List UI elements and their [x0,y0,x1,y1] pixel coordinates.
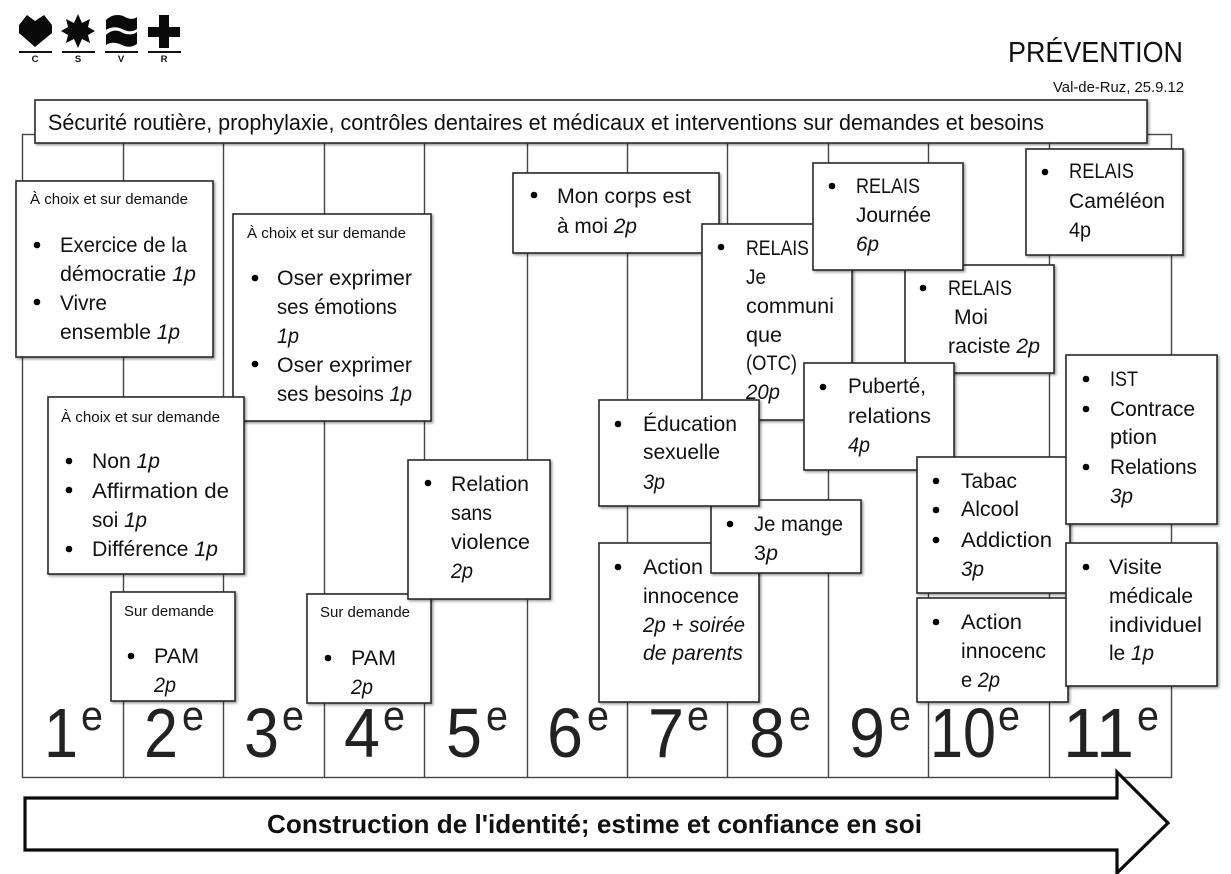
panel: tabac alcool addiction: 3p [961,558,984,581]
panel: RELAIS Caméléon: Caméléon [1069,190,1165,213]
grade labels: 9 [849,694,885,772]
panel: affirmation: À choix et sur demande [61,409,220,426]
panel: puberté [804,363,954,470]
panel: émotions et besoins: Oser exprimer [277,354,412,377]
panel: RELAIS Je communique: que [746,324,782,347]
panel: PAM 4e: 2p [350,676,373,699]
panel: RELAIS Moi raciste [905,265,1054,373]
panel: action innocence 7e [599,543,759,702]
panel: RELAIS Moi raciste: RELAIS [948,277,1012,300]
place and date: Val-de-Ruz, 25.9.12 [1053,80,1184,96]
grade labels: 1 [44,694,78,772]
panel: relation sans violence: 2p [450,560,473,583]
grade labels: 11 [1063,694,1134,772]
panel: RELAIS Moi raciste: Moi [954,306,988,329]
icon: waves [106,15,137,47]
panel: relation sans violence [408,460,550,599]
panel: visite médicale [1066,543,1217,686]
panel: tabac alcool addiction: Tabac [961,470,1017,493]
panel: émotions et besoins: À choix et sur demande [247,225,406,242]
grade labels: 8 [749,694,785,772]
panel: RELAIS Journée: RELAIS [856,175,920,198]
panel: relation sans violence: violence [451,531,530,554]
panel: émotions et besoins: ses besoins 1p [277,383,412,406]
panel: éducation sexuelle: Éducation [643,413,737,436]
panel: tabac alcool addiction [917,457,1070,593]
panel: RELAIS Je communique: RELAIS [746,237,809,260]
panel: démocratie: À choix et sur demande [30,191,188,208]
panel: affirmation: Affirmation de [92,480,229,503]
icon: heart [19,15,52,47]
panel: émotions et besoins [233,214,431,421]
panel: RELAIS Je communique: 20p [745,381,780,404]
grade labels: e [81,692,103,739]
grade labels: 5 [446,694,482,772]
grade labels: e [182,692,204,739]
logo letters [32,54,168,65]
panel: PAM 2e [111,592,235,701]
panel: affirmation: soi 1p [92,509,147,532]
title: PRÉVENTION [1008,36,1183,69]
panel: visite médicale: Visite [1109,556,1162,579]
panel: IST contraception [1066,355,1217,524]
panel: action innocence 7e: Action [643,556,703,579]
panel: RELAIS Journée: 6p [856,233,879,256]
panel: je mange [711,500,861,573]
panel: mon corps est à moi: à moi 2p [557,215,637,238]
grade labels: e [282,692,304,739]
panel: émotions et besoins: 1p [277,325,299,348]
grade labels: e [587,692,609,739]
panel: visite médicale: médicale [1109,585,1193,608]
logo underlines [19,51,181,53]
panel: émotions et besoins: Oser exprimer [277,267,412,290]
arrow: construction de l'identité: Construction de l'identité; estime et confiance en soi [267,809,922,839]
panel: RELAIS Je communique: (OTC) [746,352,797,375]
grade labels: 4 [344,694,380,772]
panel: éducation sexuelle: sexuelle [643,441,720,464]
panel: visite médicale: individuel [1109,614,1202,637]
panel: IST contraception: Contrace [1110,398,1195,421]
grade labels: 6 [547,694,583,772]
panel: PAM 4e: PAM [351,647,396,670]
panel: tabac alcool addiction: Addiction [961,529,1052,552]
grade labels: e [687,692,709,739]
panel: action innocence 10e: Action [961,611,1022,634]
panel: PAM 4e [307,594,431,703]
panel: puberté: Puberté, [848,375,926,398]
logo letters: V [118,54,125,65]
grade labels: e [1137,692,1159,739]
icon: star [61,14,95,48]
grade labels: 10 [930,694,996,772]
grade labels: e [998,692,1020,739]
panel: mon corps est à moi: Mon corps est [557,185,691,208]
panel: visite médicale: le 1p [1109,642,1154,665]
banner: general topics: Sécurité routière, prophylaxie, contrôles dentaires et médicaux et interventions sur demandes et besoins [48,110,1044,135]
panel: action innocence 7e: 2p + soirée [642,614,745,637]
panel: action innocence 10e: e 2p [961,669,1000,692]
panel: RELAIS Caméléon [1026,149,1183,255]
panel: puberté: relations [848,405,931,428]
panel: éducation sexuelle: 3p [643,471,665,494]
panel: action innocence 7e: de parents [643,642,743,665]
panel: émotions et besoins: ses émotions [277,296,397,319]
panel: démocratie [16,181,213,357]
panel: je mange: 3p [754,542,778,565]
grade labels: e [486,692,508,739]
panel: démocratie: ensemble 1p [60,321,180,344]
panel: PAM 2e: Sur demande [124,604,214,620]
grade labels: e [889,692,911,739]
panel: puberté: 4p [848,434,870,457]
panel: RELAIS Je communique: communi [746,295,834,318]
panel: PAM 2e: PAM [154,645,199,668]
panel: IST contraception: Relations [1110,456,1197,479]
panel: RELAIS Journée: Journée [856,204,931,227]
panel: RELAIS Caméléon: 4p [1069,219,1091,242]
panel: mon corps est à moi [513,173,719,253]
panel: relation sans violence: sans [451,502,492,525]
panel: affirmation [48,397,244,574]
grade labels [44,692,1159,772]
panel: action innocence 10e [917,598,1068,702]
grade grid [22,134,1172,778]
logo: C S V R [19,14,181,65]
panel: RELAIS Je communique [702,224,852,420]
panel: tabac alcool addiction: Alcool [961,498,1019,521]
panel: RELAIS Caméléon: RELAIS [1069,160,1134,183]
panel: IST contraception: 3p [1110,485,1133,508]
grade labels: 7 [648,694,684,772]
panel: démocratie: Vivre [60,292,107,315]
panel: démocratie: Exercice de la [60,234,187,257]
logo letters: R [161,54,168,65]
panel: éducation sexuelle [599,400,759,506]
panel: action innocence 10e: innocenc [961,640,1046,663]
grade labels: e [383,692,405,739]
panel: RELAIS Journée [813,163,963,270]
panel: PAM 4e: Sur demande [320,605,410,621]
panel: IST contraception: IST [1110,368,1138,391]
panel: démocratie: démocratie 1p [60,263,196,286]
grade labels: 2 [144,694,178,772]
logo letters: S [75,54,81,65]
panel: affirmation: Différence 1p [92,538,218,561]
icon: cross [148,15,180,48]
panel: IST contraception: ption [1110,426,1157,449]
panel: PAM 2e: 2p [153,674,176,697]
banner: general topics [35,100,1147,143]
grade labels: 3 [244,694,279,772]
panel: RELAIS Moi raciste: raciste 2p [948,335,1040,358]
arrow: construction de l'identité [25,772,1168,873]
panel: je mange: Je mange [754,513,843,536]
grade labels: e [789,692,811,739]
logo letters: C [32,54,39,65]
panel: RELAIS Je communique: Je [746,266,766,289]
panel: relation sans violence: Relation [451,473,529,496]
panel: action innocence 7e: innocence [643,585,739,608]
panel: affirmation: Non 1p [92,450,160,473]
